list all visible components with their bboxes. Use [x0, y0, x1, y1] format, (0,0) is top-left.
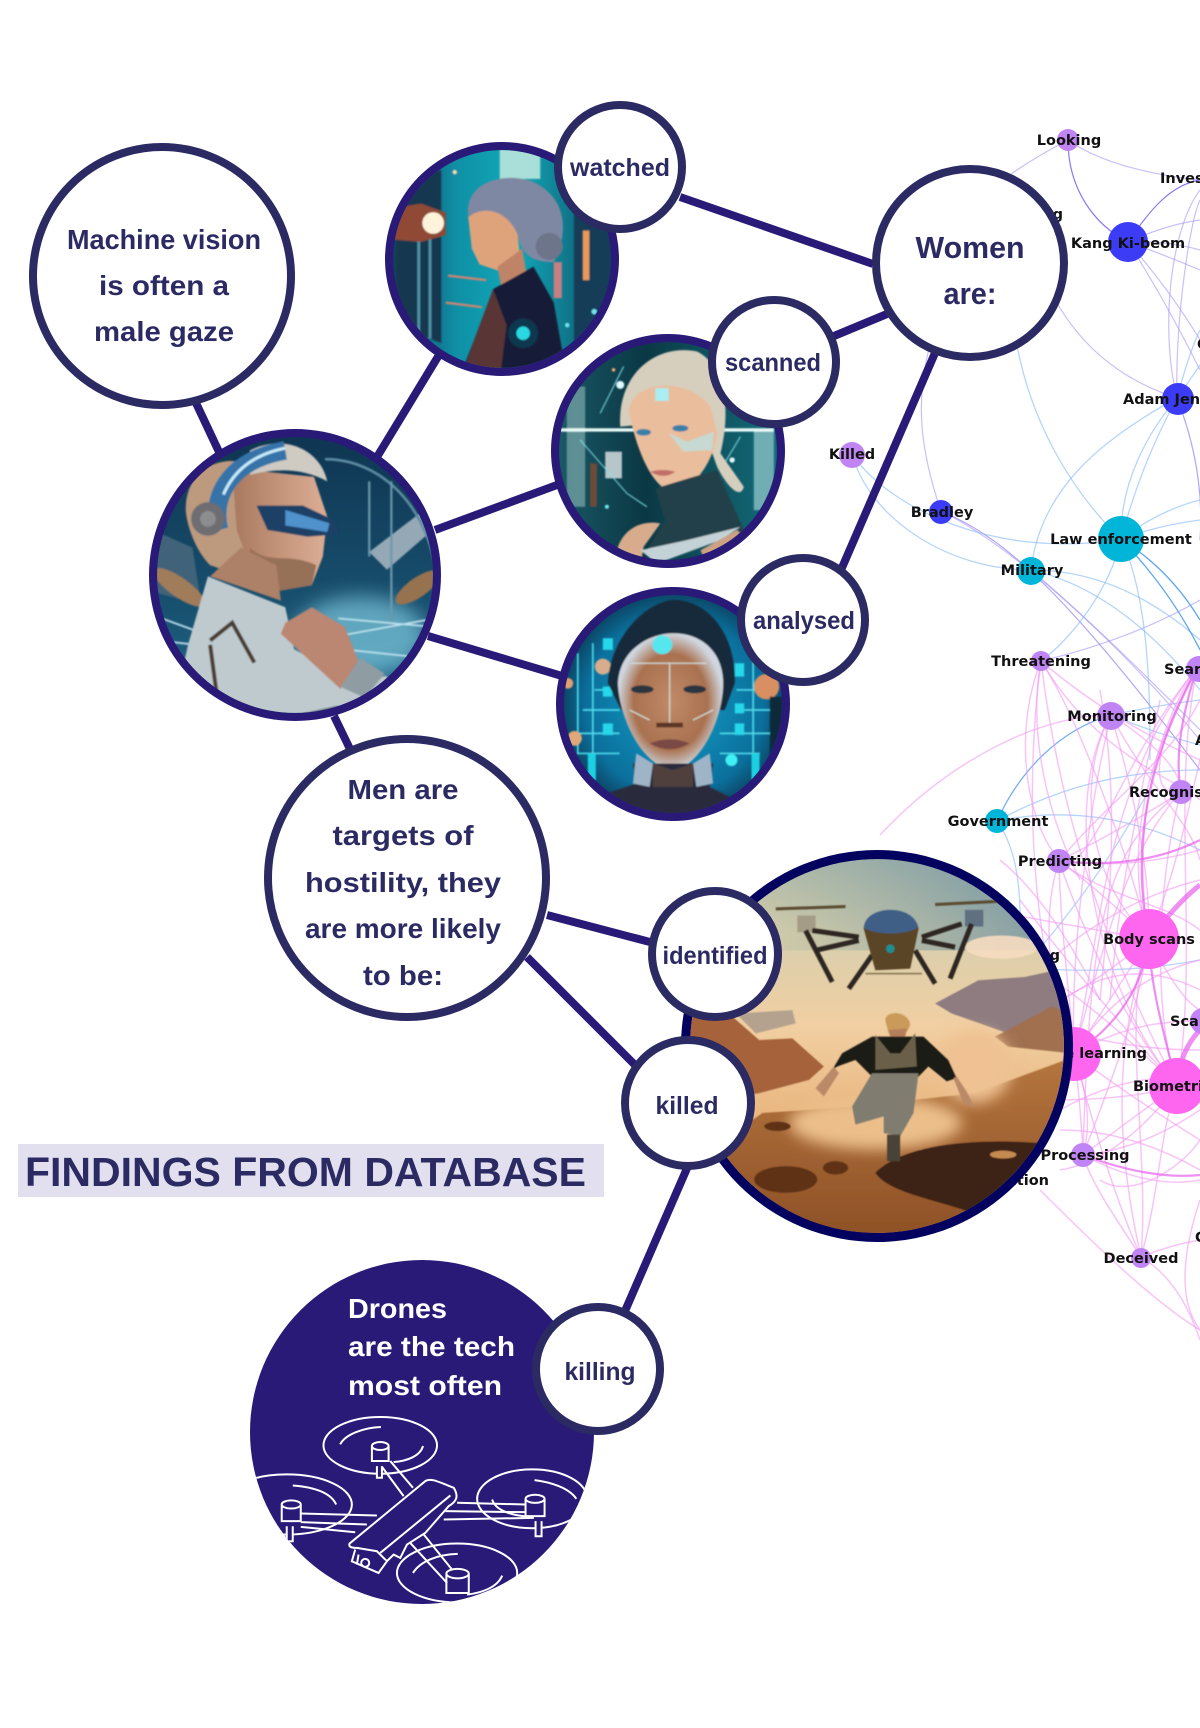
panel: men are targets statement: targets of — [332, 820, 474, 851]
network edges: strong pink — [1059, 668, 1200, 1176]
node: Processing — [1040, 1143, 1130, 1167]
node: hidden label behind circle: Tracking — [994, 207, 1063, 223]
image: woman with circuit overlay — [556, 586, 793, 824]
node: hidden label g: Tracking — [991, 948, 1060, 964]
network edges: purple — [921, 140, 1200, 770]
node: Threatening: Threatening — [991, 654, 1091, 670]
node: Deceived: Deceived — [1104, 1251, 1178, 1267]
network edges: blue — [852, 330, 1200, 970]
panel: men are targets statement: hostility, they — [305, 867, 501, 898]
panel: men are targets statement — [268, 739, 546, 1017]
panel: drones tech circle: Drones — [348, 1293, 447, 1324]
bubble: killing — [536, 1307, 660, 1431]
panel: drones tech circle: are the tech — [348, 1331, 515, 1362]
node: Government: Government — [948, 814, 1048, 830]
panel: men are targets statement: Men are — [348, 774, 458, 805]
node: Killed — [829, 442, 875, 468]
image: woman in neon city — [383, 141, 626, 384]
panel: women are: Women — [916, 230, 1024, 265]
node: Law enforcement — [1050, 516, 1192, 562]
bubble: killing: killing — [564, 1358, 636, 1386]
bubble: killed — [625, 1040, 751, 1166]
node: Monitoring: Monitoring — [1067, 709, 1157, 725]
node: Recognising (cut off) — [1129, 780, 1200, 804]
panel: women are — [876, 169, 1064, 357]
bubble: watched: watched — [569, 154, 670, 182]
node: Machine learning: Machine learning — [1006, 1046, 1147, 1062]
node: Adam Jensen — [1123, 383, 1200, 415]
bubble: analysed: analysed — [753, 607, 855, 635]
node: Kang Ki-beom — [1071, 222, 1185, 262]
network edges: pink — [880, 661, 1200, 1340]
bubble: killed: killed — [656, 1092, 718, 1120]
node: hidden label tion: Recognition — [952, 1173, 1049, 1189]
node: Looking: Looking — [1037, 133, 1101, 149]
panel: machine vision statement: male gaze — [94, 316, 234, 347]
bubble: scanned: scanned — [725, 349, 821, 377]
icon: drone line drawing — [222, 1417, 587, 1602]
node: Bradley: Bradley — [911, 505, 974, 521]
node: Killed: Killed — [829, 447, 875, 463]
panel: men are targets statement: are more likely — [305, 913, 501, 944]
node: Military — [1001, 557, 1064, 585]
network graph background — [829, 129, 1200, 1340]
node: Body scans: Body scans — [1103, 932, 1195, 948]
bubble: identified — [652, 891, 778, 1017]
panel: men are targets statement: to be: — [363, 960, 443, 991]
panel: machine vision statement — [33, 147, 291, 405]
node: Body scans — [1103, 909, 1195, 969]
node: Predicting: Predicting — [1018, 854, 1102, 870]
panel: drones tech circle: most often — [348, 1370, 502, 1401]
node: Monitoring — [1067, 702, 1157, 730]
title: findings from database: FINDINGS FROM DATABASE — [25, 1149, 586, 1195]
panel: machine vision statement: is often a — [99, 270, 229, 301]
image: scanned blonde woman — [550, 333, 787, 570]
bubble: watched — [558, 105, 682, 229]
bubble: scanned — [712, 300, 836, 424]
panel: drones tech circle — [222, 1260, 594, 1604]
node: Predicting — [1018, 849, 1102, 873]
connector lines — [196, 197, 935, 1311]
node: Bradley — [911, 500, 974, 524]
panel: women are: are: — [944, 276, 996, 311]
image: man with goggles — [148, 428, 445, 724]
bubble: identified: identified — [662, 942, 768, 970]
node: Biometrics (cut off) — [1133, 1058, 1200, 1114]
image: drone chasing man in desert — [676, 850, 1075, 1256]
node: Military: Military — [1001, 563, 1064, 579]
node: Scanning (cut off) — [1170, 1008, 1200, 1034]
node: Government — [948, 809, 1048, 833]
node: Kang Ki-beom: Kang Ki-beom — [1071, 236, 1185, 252]
bubble: analysed — [741, 558, 865, 682]
node: Searching (cut off) — [1164, 656, 1200, 682]
node: Machine learning — [1006, 1027, 1147, 1081]
panel: machine vision statement: Machine vision — [67, 224, 261, 255]
node: Law enforcement: Law enforcement — [1050, 532, 1192, 548]
node: Processing: Processing — [1040, 1148, 1130, 1164]
